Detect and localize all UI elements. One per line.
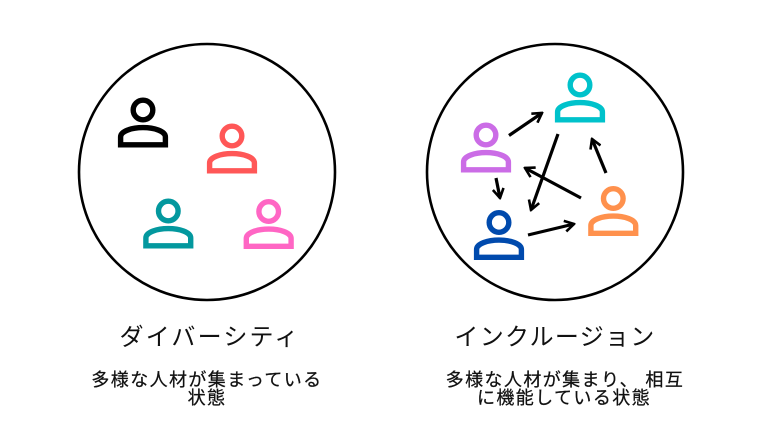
arrow: blue to orange: [528, 224, 574, 235]
icon: blue person: [477, 213, 521, 257]
icon: purple person: [464, 125, 508, 170]
arrow: orange to purple: [525, 168, 581, 198]
heading: inclusion: インクルージョン: [454, 324, 656, 351]
arrow: cyan to blue: [531, 134, 558, 210]
text: diversity description: [91, 370, 323, 408]
arrow: orange to cyan: [592, 139, 606, 173]
icon: black person: [121, 100, 165, 145]
panel: inclusion circle: [427, 44, 683, 300]
heading: diversity: ダイバーシティ: [120, 324, 300, 351]
icon: red person: [210, 126, 254, 171]
arrow: purple to blue: [496, 178, 500, 198]
icon: cyan person: [558, 75, 602, 120]
panel: diversity circle: [79, 44, 335, 300]
text: diversity description: 状態: [188, 388, 226, 408]
icon: orange person: [591, 189, 636, 233]
text: inclusion description: [446, 370, 684, 408]
arrow: purple to cyan: [509, 113, 542, 136]
text: diversity description: 多様な人材が集まっている: [91, 370, 323, 390]
text: inclusion description: に機能している状態: [477, 388, 651, 408]
text: inclusion description: 多様な人材が集まり、 相互: [446, 370, 684, 390]
icon: teal person: [146, 201, 191, 246]
icon: pink person: [246, 202, 291, 246]
